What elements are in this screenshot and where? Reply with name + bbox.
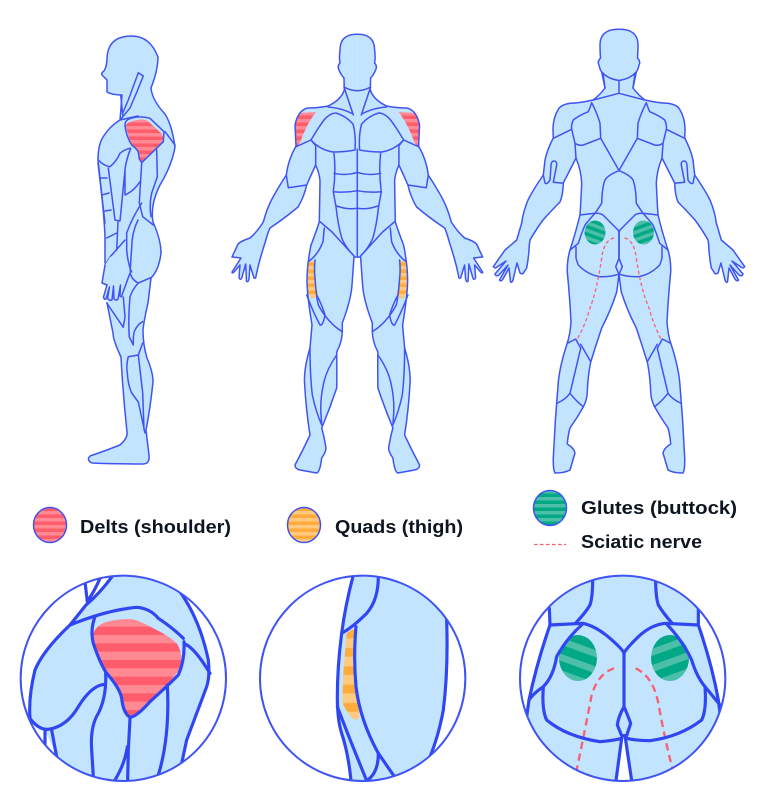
- figure: back view: [493, 29, 745, 473]
- detail circle: shoulder: [21, 570, 226, 787]
- legend: delts: [34, 508, 231, 542]
- figure: front view: [232, 34, 483, 473]
- legend: quads: Quads (thigh): [335, 516, 463, 537]
- hand: side view: [102, 250, 130, 300]
- muscle lines: side view: [98, 73, 175, 433]
- highlight: glutes back: [584, 220, 654, 244]
- legend: delts: Delts (shoulder): [80, 516, 231, 537]
- highlight: deltoid side: [126, 119, 163, 162]
- legend: glutes: [534, 490, 737, 526]
- sciatic nerve detail: [577, 668, 672, 770]
- highlight: right glute detail: [651, 635, 689, 681]
- sciatic nerve: back: [577, 238, 662, 340]
- highlight: deltoids front: [295, 112, 420, 147]
- highlight: left glute detail: [559, 635, 597, 681]
- detail circle: buttock: [510, 576, 737, 783]
- legend: quads: [288, 508, 463, 542]
- highlight: deltoid detail: [93, 619, 181, 717]
- detail circle: thigh: [260, 570, 465, 783]
- legend: glutes: Glutes (buttock): [581, 497, 737, 518]
- highlight: quads front: [307, 260, 408, 298]
- highlight: quad detail: [343, 627, 359, 719]
- figure: side view: [88, 36, 175, 464]
- legend: sciatic nerve: Sciatic nerve: [581, 531, 702, 552]
